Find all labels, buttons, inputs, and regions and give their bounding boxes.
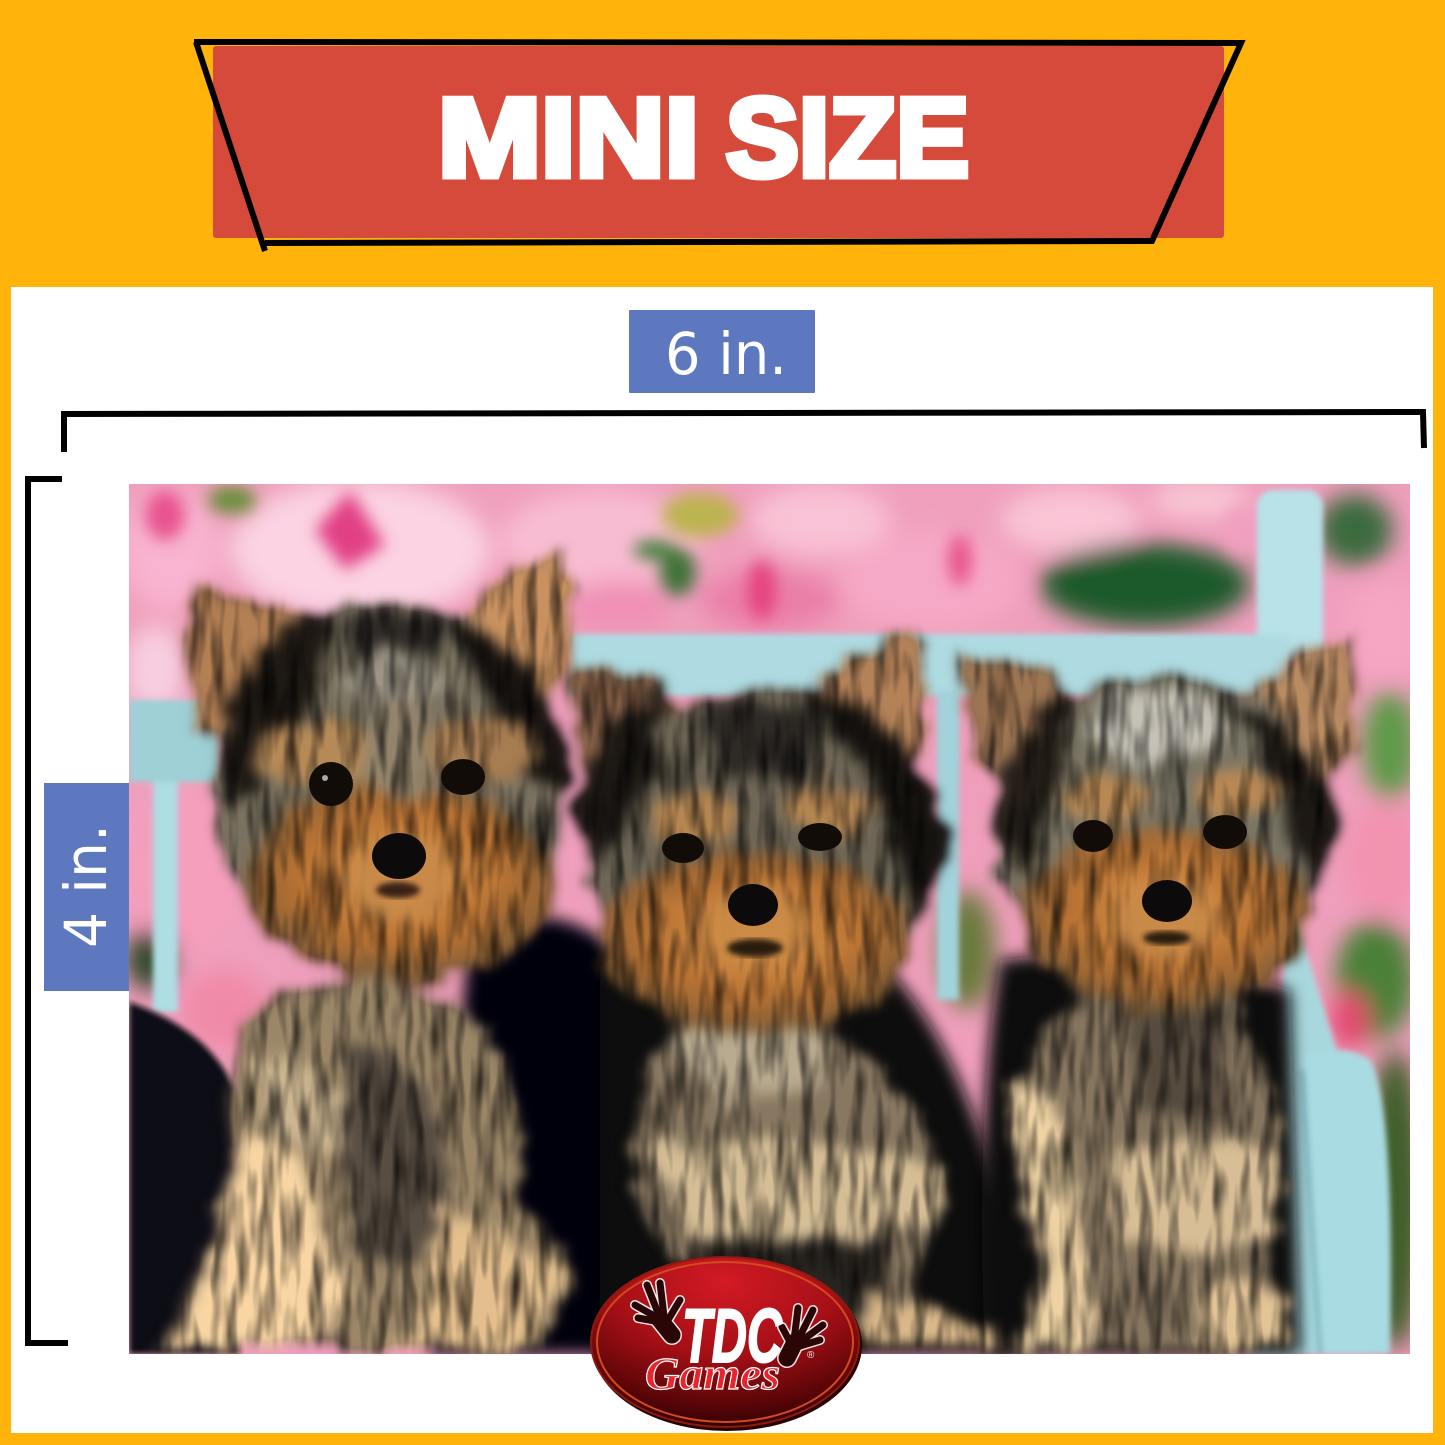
- dark body mass: [420, 906, 614, 1354]
- flowers and foliage background: [120, 480, 1425, 1350]
- white panel: [11, 287, 1433, 1433]
- black dog behind left: [129, 1002, 240, 1354]
- logo: TDC Games: ®: [807, 1350, 815, 1361]
- flower centers: [145, 486, 1255, 620]
- height label: 4 in.: [44, 783, 129, 991]
- muzzle: [245, 785, 555, 985]
- ears: [184, 580, 320, 760]
- bench: [129, 490, 1391, 1354]
- puppy 3: [948, 630, 1360, 1354]
- puppy 1: [150, 542, 575, 1354]
- icon: right hand: [782, 1308, 823, 1358]
- width bracket: [64, 412, 1424, 452]
- title: SIZE: [726, 76, 969, 200]
- title banner: [194, 42, 1241, 251]
- logo: TDC Games: [591, 1257, 862, 1431]
- icon: left hand: [635, 1283, 680, 1335]
- face: [309, 759, 485, 920]
- height bracket: [28, 479, 68, 1343]
- width label: 6 in.: [629, 310, 815, 393]
- height label: 4 in.: 4 in.: [52, 824, 120, 948]
- logo wordmark: TDC: [682, 1294, 783, 1379]
- puppy 2: [556, 625, 1000, 1354]
- logo: TDC Games: Games: [645, 1348, 780, 1399]
- body: [150, 981, 574, 1354]
- photo: three yorkshire terrier puppies: [120, 480, 1425, 1354]
- title: [438, 76, 969, 200]
- title: MINI: [438, 76, 699, 200]
- width label: 6 in.: 6 in.: [665, 320, 787, 388]
- head: [202, 594, 574, 908]
